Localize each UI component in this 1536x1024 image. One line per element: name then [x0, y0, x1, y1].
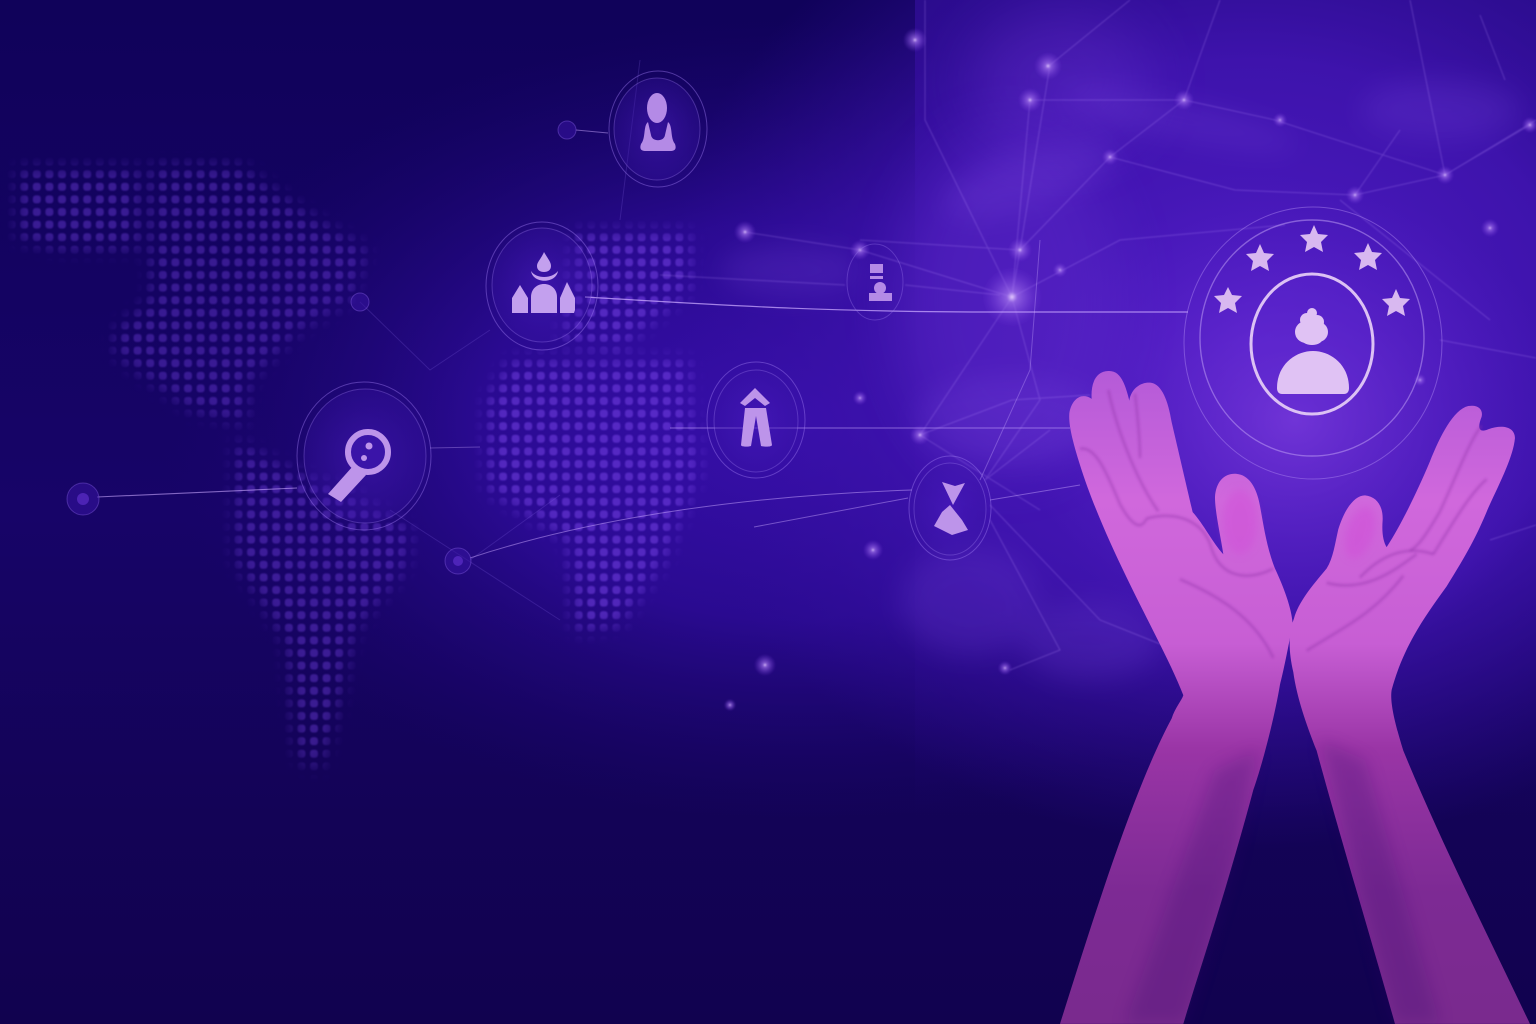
right hand: [1290, 406, 1530, 1024]
connector lines: [97, 130, 1188, 558]
stars: [1214, 225, 1410, 316]
hero rating badge: [1184, 207, 1442, 479]
icon: person bust node: [609, 71, 707, 187]
thumb highlights: [1223, 490, 1257, 554]
icon: magnifier node: [297, 382, 431, 530]
icon: group node: [486, 222, 598, 350]
left hand: [1060, 371, 1293, 1024]
icon: stacked node: [847, 244, 903, 320]
dotted world map: [0, 150, 720, 790]
icon: hourglass node: [909, 456, 991, 560]
arm shadow: [1125, 740, 1440, 1024]
glowing network nodes: [724, 28, 1536, 711]
faint map links: [360, 60, 640, 620]
hands: [1060, 371, 1530, 1024]
icon: figure node: [707, 362, 805, 478]
small end nodes: [67, 121, 576, 574]
haze streaks: [720, 77, 1520, 680]
finger and palm shading: [1080, 390, 1487, 658]
network of faint lines: [660, 0, 1536, 670]
person: [1277, 308, 1349, 394]
